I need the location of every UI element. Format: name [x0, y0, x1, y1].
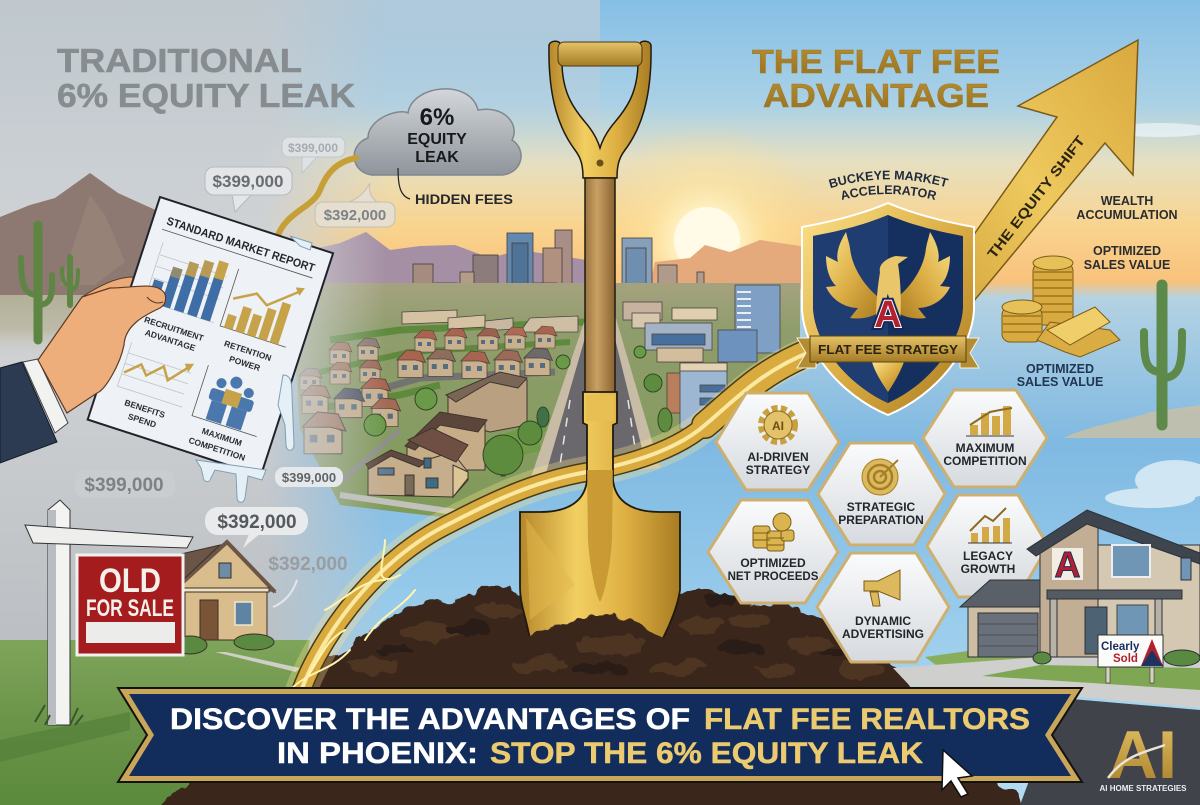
- icon: target: [862, 459, 898, 495]
- chart: benefits spend: [108, 342, 196, 436]
- panel title: traditional leak: TRADITIONAL: [57, 42, 302, 79]
- clouds on right side: [1105, 123, 1200, 508]
- block A logo: A: [874, 294, 902, 336]
- bubble: faint 399,000: $399,000: [288, 141, 338, 155]
- headline line 1: [170, 703, 1030, 736]
- optimized sales value label upper: SALES VALUE: [1084, 258, 1170, 272]
- hand and sleeve: [0, 286, 166, 463]
- cloud: 6% equity leak: EQUITY: [407, 131, 467, 148]
- hexagon: legacy growth: LEGACY: [963, 549, 1013, 563]
- hexagon: optimized net proceeds: [708, 500, 838, 603]
- standard market report: [88, 197, 333, 476]
- shovel blade: [520, 392, 680, 640]
- hexagon: legacy growth: [927, 495, 1048, 597]
- cloud: 6% equity leak: 6%: [420, 104, 454, 131]
- chart: maximum competition: COMPETITION: [187, 435, 247, 463]
- phoenix emblem: [826, 232, 950, 392]
- sign board: OLD: [99, 562, 161, 600]
- icon: megaphone: [864, 570, 900, 606]
- ground: city and neighbourhoods: [290, 283, 800, 518]
- hexagon: strategic preparation: [818, 443, 945, 545]
- chart: benefits spend: SPEND: [127, 411, 158, 430]
- left desert mountains: [0, 173, 170, 360]
- chart: recruitment advantage: [134, 242, 233, 356]
- glowing gold ribbon: [290, 352, 810, 700]
- left gray overlay: [0, 0, 382, 656]
- chart: retention power: [210, 267, 305, 379]
- price bubbles: [75, 137, 395, 607]
- cloud: 6% equity leak: [354, 89, 521, 175]
- clearly sold yard sign: Sold: [1113, 653, 1138, 665]
- grass lawn left: [0, 640, 310, 805]
- banner: headline: [118, 688, 1082, 782]
- headline line 1: DISCOVER THE ADVANTAGES OF: [170, 703, 690, 736]
- panel title: traditional leak: 6% EQUITY LEAK: [57, 77, 355, 114]
- clearly sold yard sign: Clearly: [1101, 641, 1140, 653]
- bubble: 399,000 upper: [205, 167, 292, 212]
- palm and thumb: [38, 286, 166, 413]
- icon: coin stacks: [753, 513, 794, 551]
- bubble: 392,000 plain: $392,000: [268, 554, 348, 575]
- hexagon: ai-driven strategy: STRATEGY: [746, 463, 810, 477]
- panel title: flat fee advantage: [752, 43, 1000, 114]
- logo: ai home strategies: AI HOME STRATEGIES: [1100, 784, 1187, 793]
- bubble: 392,000 plain: [268, 554, 348, 607]
- chart: recruitment advantage: ADVANTAGE: [144, 327, 197, 353]
- hexagon: optimized net proceeds: NET PROCEEDS: [728, 571, 819, 583]
- right dune and cactus: [1063, 285, 1200, 438]
- chart: benefits spend: BENEFITS: [123, 397, 167, 420]
- shovel grip: [549, 41, 651, 178]
- small houses rows: [299, 326, 557, 454]
- hidden fees callout: [398, 168, 513, 207]
- house logo: A: [1054, 544, 1080, 585]
- right modern house: [960, 510, 1200, 666]
- gold coins and bars: [1002, 256, 1120, 357]
- buckeye market accelerator arc: [828, 170, 949, 200]
- strategy ribbon: FLAT FEE STRATEGY: [818, 342, 958, 357]
- sign board: FOR SALE: [86, 595, 174, 622]
- gold equity arrow: [900, 40, 1138, 360]
- bubble: 392,000 lower: [205, 507, 308, 548]
- hedges and streets: [320, 322, 585, 512]
- optimized sales value label lower: OPTIMIZED: [1026, 362, 1094, 376]
- icon: rising bars: [966, 406, 1014, 436]
- chart: recruitment advantage: RECRUITMENT: [143, 314, 206, 343]
- bubble: 399,000 small: $399,000: [282, 470, 336, 485]
- city skyline: [382, 230, 704, 308]
- sleeve: [0, 362, 57, 463]
- bubble: 392,000 upper: $392,000: [324, 207, 386, 224]
- block A logo: A: [874, 294, 902, 336]
- front soil clumps: [512, 636, 708, 675]
- bubble: 399,000 lower left: [75, 470, 175, 498]
- headline line 2: [277, 737, 923, 770]
- distant mountains: [300, 232, 830, 290]
- hexagon: maximum competition: COMPETITION: [943, 454, 1027, 468]
- icon: setting sun: [587, 122, 827, 362]
- bubble: faint 399,000: [282, 137, 345, 173]
- chart: maximum competition: MAXIMUM: [201, 426, 243, 448]
- hexagon: ai-driven strategy: [716, 393, 839, 490]
- logo: ai home strategies: AI: [1108, 717, 1177, 793]
- hexagon: dynamic advertising: [817, 553, 949, 662]
- soil mound front: [395, 616, 790, 695]
- low-rise buildings: [402, 285, 780, 429]
- gold leak from cloud to report: [277, 158, 356, 238]
- hidden fees callout: HIDDEN FEES: [415, 191, 513, 207]
- panel title: flat fee advantage: ADVANTAGE: [763, 77, 989, 114]
- optimized sales value label lower: [1017, 362, 1103, 389]
- bubble: 392,000 lower: $392,000: [217, 512, 297, 533]
- wealth accumulation label: WEALTH: [1101, 194, 1153, 208]
- for sale sign: [25, 500, 193, 725]
- trees: [364, 346, 672, 476]
- golden shovel: [520, 41, 680, 640]
- hexagon: dynamic advertising: ADVERTISING: [842, 627, 924, 641]
- panel title: flat fee advantage: THE FLAT FEE: [752, 43, 1000, 80]
- right house lot ground: [893, 650, 1200, 708]
- report heading: STANDARD MARKET REPORT: [165, 216, 316, 275]
- icon: ai gear: AI: [772, 419, 784, 433]
- optimized sales value label lower: SALES VALUE: [1017, 375, 1103, 389]
- hexagon: strategic preparation: PREPARATION: [838, 513, 924, 527]
- hexagon: maximum competition: MAXIMUM: [956, 441, 1014, 455]
- wealth accumulation label: [1076, 194, 1178, 222]
- panel title: traditional leak: [57, 42, 355, 114]
- optimized sales value label upper: OPTIMIZED: [1093, 244, 1161, 258]
- headline line 1: FLAT FEE REALTORS: [704, 703, 1030, 736]
- bubble: 399,000 small: [275, 467, 343, 487]
- cuff: [23, 359, 68, 433]
- arrow label: THE EQUITY SHIFT: [984, 132, 1088, 261]
- large neighbourhood houses: [366, 372, 527, 497]
- hexagon: strategic preparation: STRATEGIC: [847, 500, 916, 514]
- dark road bottom right: [1020, 698, 1200, 805]
- buckeye market accelerator arc: ACCELERATOR: [842, 185, 936, 200]
- chart: retention power: POWER: [228, 354, 262, 373]
- hexagon: dynamic advertising: DYNAMIC: [855, 614, 911, 628]
- chart: maximum competition: [183, 365, 273, 464]
- soil mound back: [155, 589, 1035, 805]
- headline line 2: STOP THE 6% EQUITY LEAK: [490, 737, 923, 770]
- cloud: 6% equity leak: LEAK: [415, 149, 459, 166]
- strategy ribbon: [797, 336, 979, 368]
- buckeye market accelerator arc: BUCKEYE MARKET: [828, 170, 949, 188]
- icon: mouse cursor: [942, 750, 972, 797]
- sign board: [77, 555, 183, 655]
- hexagon: maximum competition: [923, 390, 1047, 487]
- hexagon: optimized net proceeds: OPTIMIZED: [740, 556, 806, 570]
- wealth accumulation label: ACCUMULATION: [1076, 208, 1178, 222]
- shovel shaft: [585, 178, 615, 393]
- bubble: 392,000 upper: [315, 183, 395, 227]
- headline line 2: IN PHOENIX:: [277, 737, 478, 770]
- lightning: [290, 540, 415, 690]
- sold sign house: [155, 542, 300, 672]
- shield: flat fee strategy: [797, 203, 979, 415]
- hexagon: legacy growth: GROWTH: [961, 562, 1015, 576]
- clearly sold yard sign: [1098, 635, 1163, 683]
- bubble: 399,000 lower left: $399,000: [84, 475, 164, 496]
- hand: fingers behind report: [82, 277, 160, 345]
- chart: retention power: RETENTION: [223, 338, 273, 363]
- melting drips on report: [196, 236, 312, 502]
- road: [530, 305, 660, 480]
- optimized sales value label upper: [1084, 244, 1170, 272]
- hexagon: ai-driven strategy: AI-DRIVEN: [747, 450, 809, 464]
- icon: left cacti: [21, 225, 78, 340]
- soil clumps: [344, 603, 880, 679]
- bubble: 399,000 upper: $399,000: [213, 172, 283, 191]
- icon: growth chart: [968, 508, 1012, 543]
